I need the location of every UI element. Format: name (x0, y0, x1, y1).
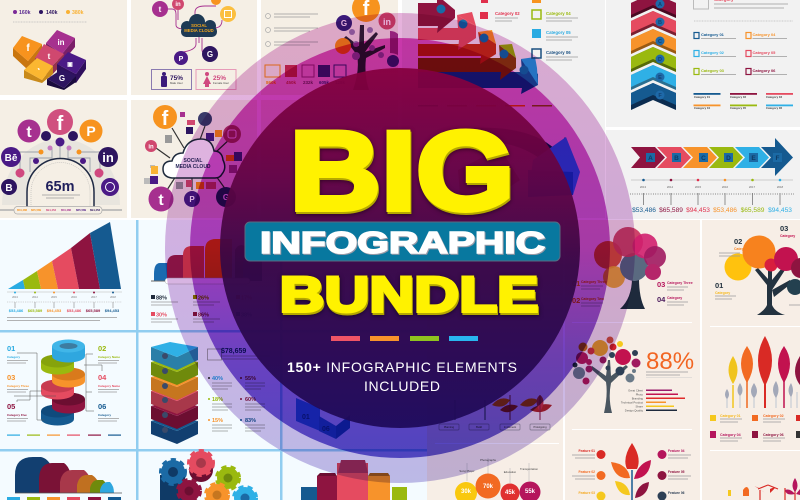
panel: 65m arch social circles: $65,589 (31, 208, 42, 212)
panel: 88% tree with bars: Share (636, 404, 643, 408)
panel: 3D arches with percentages: 38% (241, 312, 252, 318)
panel: bubble chart: 45k (505, 490, 516, 496)
panel: bubble chart: 55k (525, 489, 536, 495)
panel: social media cloud with user split: P (179, 56, 184, 63)
subtitle text (287, 359, 517, 394)
social squares: 860k (266, 80, 277, 85)
panel: arrow timeline (630, 138, 794, 214)
panel: arrow timeline: 2015 (695, 185, 702, 189)
panel: 65m arch social circles: $53,486 (61, 208, 72, 212)
panel: 3D blocks: 06 (322, 426, 330, 433)
panel: 88% tree with bars: Technical Product (621, 400, 643, 404)
panel: 3D arches with percentages: 86% (198, 312, 209, 318)
panel: leaf plant row: Implement (504, 425, 516, 429)
panel: arrow timeline: 2013 (640, 185, 647, 189)
panel: arrow timeline: 2017 (749, 185, 756, 189)
panel: leaf plant row: Planning (444, 425, 455, 429)
panel: right circle tree (715, 224, 800, 315)
panel: 3D stacked arrows (418, 0, 552, 106)
panel: social media cloud with icons (144, 105, 242, 212)
panel: arrow timeline: B (674, 155, 679, 162)
panel: right circle tree: 03 (780, 224, 788, 233)
panel: leaf tree row (710, 336, 800, 441)
panel: overlapping circle tree: Category Three (581, 280, 607, 284)
arrow E (418, 57, 538, 94)
panel: arrow timeline: 2014 (667, 185, 674, 189)
panel: bubble chart: 70k (483, 484, 494, 490)
panel: 3D arches with percentages: 17% (241, 296, 252, 302)
panel: category legend: Category 06 (752, 68, 776, 73)
panel: 3D arches with percentages: 88% (156, 296, 167, 302)
panel: leaf plant row (439, 395, 552, 430)
panel: stacked 3D boxes with stats (151, 342, 270, 444)
panel: stacked cylinders: 01 (7, 344, 15, 353)
panel: sprouting plants (728, 478, 800, 500)
panel: 65m arch social circles: $53,486 (17, 208, 28, 212)
panel: arrow timeline: C (701, 155, 706, 162)
panel: 88% tree with bars: Branding (632, 396, 643, 400)
panel: bubble chart: Education (504, 470, 517, 474)
panel: arrow timeline: 2018 (777, 185, 784, 189)
panel: 88% tree with bars: 88% (646, 348, 694, 375)
panel: chevron stack: A (658, 2, 662, 8)
panel: category legend: Category 04 (752, 32, 776, 37)
tiles: ▣ (67, 62, 73, 68)
panel: 3D arches with percentages (151, 239, 262, 322)
panel: shrinking 3D arches (7, 457, 122, 500)
tiles: t (48, 52, 51, 61)
panel: social media cloud with icons: SOCIAL (184, 158, 202, 164)
social squares: 128k (335, 80, 346, 85)
panel: social media cloud with user split: G (207, 50, 213, 59)
panel: stacked 3D boxes with stats: 60% (245, 397, 256, 403)
panel: leaf tree row: Category 02 (763, 414, 784, 418)
panel: arrow timeline: A (648, 155, 653, 162)
tiles: in (57, 38, 65, 47)
panel: social media tree (265, 0, 399, 90)
tree (344, 25, 385, 90)
panel: 65m arch social circles: $65,589 (76, 208, 87, 212)
panel: gears (160, 451, 256, 500)
panel: social media tree: G (341, 19, 347, 28)
user boxes (152, 70, 192, 90)
panel: feature leaf plant: Feature 06 (668, 491, 685, 495)
panel: right circle tree: Category (715, 291, 730, 295)
panel: category legend: Category 01 (701, 32, 725, 37)
panel: feature leaf plant: Feature 01 (578, 449, 595, 453)
panel: stacked cylinders (7, 340, 121, 436)
panel: social media cloud with icons: t (158, 192, 164, 209)
panel: bubble chart: Transportation (520, 467, 538, 471)
stats row: 380k (72, 10, 84, 16)
panel: stacked cylinders: Category Name (98, 355, 120, 359)
panel: stacked cylinders: 06 (98, 402, 106, 411)
panel: stacked cylinders: Category Five (7, 413, 27, 417)
panel: stacked 3D boxes with stats: 18% (212, 397, 223, 403)
panel: chevron stack (631, 0, 676, 110)
panel: 65m arch social circles: $94,453 (46, 208, 57, 212)
panel: stacked cylinders: 02 (98, 344, 106, 353)
panel: 65m arch social circles: 65m (45, 179, 75, 195)
overlay: middle colored ring (190, 38, 610, 458)
cloud (181, 14, 217, 37)
stats row (13, 10, 87, 22)
panel: staircase area chart: $65,589 (28, 308, 43, 313)
panel: staircase area chart: $53,486 (67, 308, 82, 313)
panel: 88% tree with bars: Photo (636, 392, 643, 396)
title: BUNDLE: BUNDLE (280, 266, 538, 322)
panel: category legend: Category 01 (694, 95, 710, 99)
panel: social media cloud with user split: 75% (170, 75, 183, 82)
panel: category icon list: Category 02 (495, 11, 520, 16)
panel: 65m arch social circles: P (86, 123, 96, 139)
panel: arrow timeline: $94,453 (768, 207, 792, 214)
decorative colored bars (331, 336, 478, 341)
panel: feature leaf plant: Feature 02 (578, 470, 595, 474)
subtitle text: 150+ INFOGRAPHIC ELEMENTS (287, 359, 517, 375)
panel: 3D arc arrow (458, 128, 580, 200)
panel: social media cloud with icons: MEDIA CLOUD (175, 164, 211, 170)
panel: category legend: Category 03 (701, 68, 725, 73)
panel: stacked 3D boxes with stats: 55% (245, 376, 256, 382)
panel: staircase area chart: 2013 (12, 295, 18, 299)
panel: overlapping circle tree: 04 (657, 295, 666, 304)
panel: stacked 3D boxes with stats: 83% (245, 418, 256, 424)
tiles: ◔ (36, 65, 41, 74)
panel: 65m arch social circles: B (5, 183, 13, 194)
panel: staircase area chart: 2014 (32, 295, 38, 299)
panel: staircase area chart: 2017 (91, 295, 97, 299)
panel: 3D blocks: 01 (302, 414, 310, 421)
panel: bubble chart: Song Player (459, 469, 475, 473)
panel: category legend: Category 02 (701, 50, 725, 55)
panel: arrow timeline: $53,486 (713, 207, 737, 214)
panel: leaf plant row: Prototyping (533, 425, 547, 429)
panel: feature leaf plant: Feature 04 (668, 449, 685, 453)
panel: 65m arch social circles (0, 109, 122, 214)
panel: overlapping circle tree: 02 (572, 296, 580, 305)
panel: staircase area chart: 2015 (51, 295, 57, 299)
panel: social media cloud with user split: t (159, 5, 162, 14)
panel: social media cloud with icons: P (189, 195, 195, 204)
panel: 3D arches with percentages: 26% (198, 296, 209, 302)
panel: bubble chart: 30k (461, 489, 472, 495)
panel: bubble chart (455, 458, 540, 500)
timeline (631, 179, 793, 181)
subtitle text: INCLUDED (364, 378, 440, 394)
panel: category legend: Category 04 (694, 106, 710, 110)
panel: social media cloud with user split: SOCIAL (191, 23, 207, 28)
panel: arrow timeline: $65,589 (659, 207, 683, 214)
panel: arrow timeline: $53,486 (632, 207, 656, 214)
panel: 3D arches with percentages: 30% (156, 312, 167, 318)
panel: arrow timeline: 2016 (722, 185, 729, 189)
title: BIG: BIG (290, 108, 514, 234)
title banner: INFOGRAPHIC: INFOGRAPHIC (260, 225, 545, 260)
panel: category legend: Category 02 (730, 95, 746, 99)
panel: stacked 3D boxes with stats: 40% (212, 376, 223, 382)
panel: 88% tree with bars: Design Quality (625, 408, 644, 412)
panel: social media cloud with icons: f (162, 108, 169, 130)
panel: category legend (694, 0, 793, 110)
panel: staircase area chart: 2016 (71, 295, 77, 299)
panel: chevron stack: F (658, 93, 662, 99)
panel: staircase area chart: $94,453 (105, 308, 120, 313)
panel: feature leaf plant: Feature 03 (578, 491, 595, 495)
panel: stacked cylinders: Category Three (7, 384, 29, 388)
overlay: central dark circle (220, 68, 580, 428)
panel: leaf tree row: Category 01 (720, 414, 741, 418)
small icons around cloud (144, 112, 242, 189)
panel: 88% tree with bars (572, 336, 694, 413)
panel: chevron stack: C (658, 39, 662, 45)
stats row: 140k (46, 10, 58, 16)
panel: right circle tree: Category (734, 247, 749, 251)
chevrons (631, 0, 676, 110)
panel: arrow timeline: E (751, 155, 756, 162)
panel: chevron stack: D (658, 57, 662, 63)
panel: stacked 3D boxes with stats: $78,659 (221, 348, 246, 355)
stats row: 160k (19, 10, 31, 16)
panel: overlapping circle tree: Category (667, 296, 682, 300)
panel: 65m arch social circles: f (57, 113, 64, 135)
panel: social media tree: in (383, 17, 391, 27)
panel: right circle tree: 02 (734, 237, 742, 246)
tiles: f (26, 43, 30, 54)
overlay: outer pale ring (165, 13, 635, 483)
panel: leaf tree row: Category 06 (763, 433, 784, 437)
panel: overlapping circle tree: Category Two (581, 297, 604, 301)
panel: arrow timeline: D (726, 155, 731, 162)
panel: bubble chart: Photographs (480, 458, 497, 462)
panel: 65m arch social circles: t (26, 124, 32, 141)
panel: staircase area chart (7, 222, 122, 320)
list rows (266, 14, 270, 46)
panel: social media cloud with user split: in (175, 2, 181, 8)
arrow C (418, 30, 496, 64)
panel: overlapping circle tree: 01 (572, 279, 580, 288)
panel: stacked cylinders: 03 (7, 373, 15, 382)
panel: staircase area chart: 2018 (110, 295, 116, 299)
panel: leaf tree row: Category 04 (720, 433, 741, 437)
arrow A (418, 0, 455, 33)
panel: right circle tree: Category (780, 234, 795, 238)
arrows (631, 138, 793, 176)
panel: stacked 3D boxes with stats: 15% (212, 418, 223, 424)
panel: category icon list: Category 04 (546, 11, 571, 16)
social squares: 605k (319, 80, 330, 85)
panel: 65m arch social circles: Bē (5, 153, 18, 164)
arrow D (418, 44, 516, 80)
social squares: 450k (286, 80, 297, 85)
panel: category legend: Category 05 (752, 50, 776, 55)
panel: social media cloud with icons: in (148, 144, 154, 150)
panel: stacked cylinders: 05 (7, 402, 15, 411)
panel: isometric social tiles (13, 10, 87, 90)
panel: social media cloud with user split: Male User (170, 81, 183, 85)
arrow legend (418, 105, 552, 106)
panel: category icon list: Category 06 (546, 50, 571, 55)
panel: social media cloud with icons: G (223, 193, 229, 202)
panel: stacked cylinders: Category (98, 413, 111, 417)
panel: arrow timeline: $65,589 (741, 207, 765, 214)
arrow B (418, 12, 476, 50)
panel: 65m arch social circles: in (102, 150, 114, 165)
panel: chevron stack: E (658, 75, 662, 81)
tiles: G (59, 74, 65, 83)
panel: category icon list: Category 05 (546, 30, 571, 35)
panel: overlapping circle tree (572, 227, 693, 309)
panel: category legend: Category 03 (766, 95, 782, 99)
panel: overlapping circle tree: Category Three (667, 281, 693, 285)
social squares (265, 65, 346, 85)
panel: category legend: Category 06 (766, 106, 782, 110)
panel: staircase area chart: $53,486 (9, 308, 24, 313)
panel: social media cloud with user split: MEDIA CLOUD (184, 28, 214, 33)
panel: staircase area chart: $94,453 (47, 308, 62, 313)
panel: chevron stack: B (658, 20, 662, 26)
panel: right circle tree: 01 (715, 281, 723, 290)
social squares: 232k (303, 80, 314, 85)
panel: category icon list (480, 0, 578, 60)
title banner: INFOGRAPHIC (245, 222, 560, 261)
panel: 88% tree with bars: Great Client (628, 388, 643, 392)
panel: 65m arch social circles: $94,453 (90, 208, 101, 212)
panel: stacked cylinders: Category (7, 355, 20, 359)
panel: social media cloud with user split: 25% (213, 75, 226, 82)
panel: feature leaf plant (572, 443, 691, 500)
panel: leaf plant row: Build (476, 425, 482, 429)
panel: social media cloud with user split: Female User (213, 81, 229, 85)
panel: staircase area chart: $65,589 (86, 308, 101, 313)
panel: arrow timeline: $94,453 (686, 207, 710, 214)
panel: category legend: Category 05 (730, 106, 746, 110)
panel: stacked cylinders: Category Name (98, 384, 120, 388)
panel: stacked cylinders: 04 (98, 373, 107, 382)
panel: social media cloud with user split (152, 0, 236, 90)
panel: 3D blocks (296, 398, 407, 500)
panel: feature leaf plant: Feature 05 (668, 470, 685, 474)
panel: arrow timeline: F (776, 155, 780, 162)
tiles (13, 30, 86, 90)
panel: overlapping circle tree: 03 (657, 280, 665, 289)
cloud outline (163, 139, 225, 178)
